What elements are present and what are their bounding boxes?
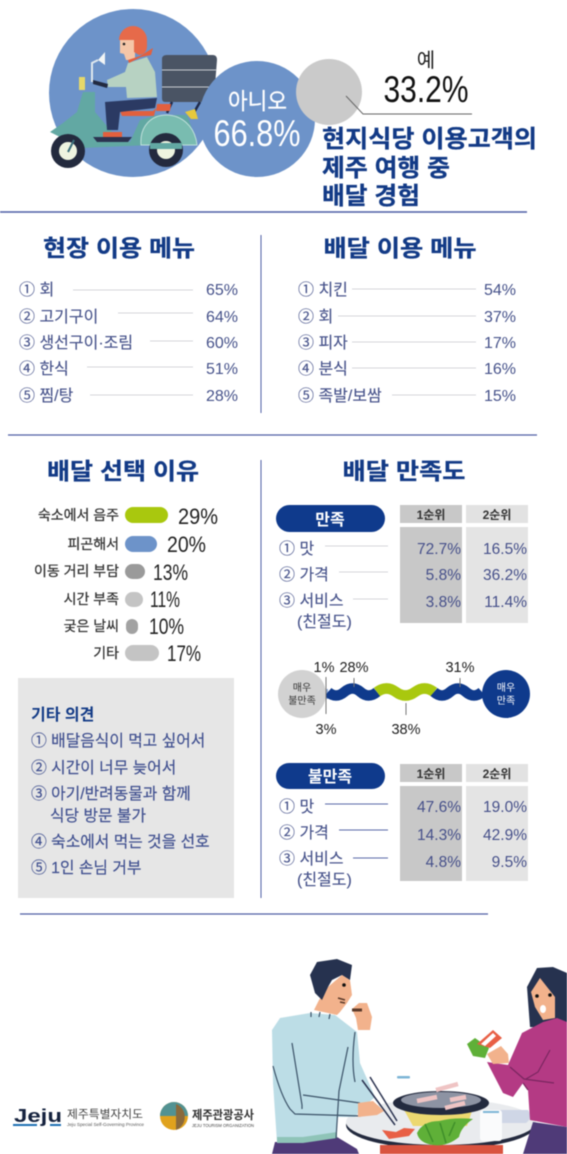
panel: other opinions: ⑤ 1인 손님 거부: [31, 859, 141, 877]
logo: Jeju special self-governing province: [13, 1106, 145, 1127]
panel: other opinions: 기타 의견: [31, 706, 94, 724]
list: delivery menu: 16%: [484, 361, 516, 378]
chart: satisfaction scale: 매우: [497, 682, 515, 694]
bar chart: reasons: 기타: [93, 645, 119, 661]
chart: satisfaction scale: 매우: [293, 682, 311, 694]
woman: [467, 967, 567, 1154]
panel: other opinions: ② 시간이 너무 늦어서: [31, 759, 176, 777]
heading: satisfaction: 배달 만족도: [342, 458, 466, 484]
chart: satisfaction scale: [278, 660, 530, 738]
bar chart: reasons: 17%: [167, 641, 201, 666]
table: dissatisfied: 19.0%: [483, 799, 527, 816]
table: dissatisfied: 4.8%: [426, 854, 461, 871]
heading: on-site menu: 현장 이용 메뉴: [43, 235, 195, 261]
bar chart: reasons: 시간 부족: [64, 591, 119, 607]
heading: delivery experience: 제주 여행 중: [322, 155, 450, 182]
bar chart: reasons: 이동 거리 부담: [34, 563, 119, 579]
panel: other opinions: [18, 678, 234, 898]
bar chart: reasons: 13%: [153, 560, 188, 585]
table: satisfied: (친절도): [297, 613, 352, 631]
list: on-site menu: ⑤ 찜/탕: [19, 387, 74, 405]
logo: Jeju special self-governing province: 제주특별자치도: [67, 1108, 143, 1121]
list: delivery menu: 54%: [484, 282, 516, 299]
chart: satisfaction scale: 38%: [391, 722, 421, 738]
list: on-site menu: ④ 한식: [19, 360, 69, 378]
list: on-site menu: 64%: [206, 309, 238, 326]
table: dissatisfied: (친절도): [297, 871, 352, 889]
table: satisfied: 36.2%: [483, 567, 527, 584]
logo: Jeju tourism organization: [160, 1102, 254, 1130]
icon: delivery scooter rider: [49, 9, 217, 177]
chart: no share circle: 66.8%: [214, 113, 300, 154]
list: delivery menu: ③ 피자: [298, 334, 348, 352]
table: dissatisfied: ③ 서비스: [279, 850, 344, 868]
list: delivery menu: ④ 분식: [298, 360, 348, 378]
heading: delivery menu: 배달 이용 메뉴: [324, 235, 476, 261]
chart: satisfaction scale: 만족: [497, 695, 515, 707]
bar chart: reasons: 10%: [149, 614, 184, 639]
panel: other opinions: ③ 아기/반려동물과 함께: [31, 785, 191, 803]
table and grill: [346, 1076, 536, 1154]
heading: delivery experience: 현지식당 이용고객의: [322, 126, 537, 153]
table: satisfied: ③ 서비스: [279, 592, 344, 610]
chart: no share circle: 아니오: [228, 88, 287, 114]
logo: Jeju special self-governing province: Jeju Special Self-Governing Province: [67, 1122, 145, 1127]
table: dissatisfied: 불만족: [308, 768, 352, 786]
table: satisfied: 11.4%: [484, 594, 527, 611]
list: delivery menu: 17%: [484, 335, 516, 352]
table: dissatisfied: 1순위: [417, 767, 445, 781]
bar chart: reasons: 29%: [178, 504, 218, 529]
table: satisfied: ① 맛: [279, 540, 314, 558]
list: on-site menu: ① 회: [19, 281, 54, 299]
panel: delivery menu: [298, 235, 516, 405]
panel: on-site menu: [19, 235, 238, 405]
table: satisfied: [276, 505, 528, 631]
logo: Jeju tourism organization: 제주관광공사: [192, 1107, 254, 1122]
table: satisfied: 만족: [315, 511, 345, 529]
chart: satisfaction scale: 3%: [316, 722, 337, 738]
chart: yes share circle: [296, 49, 472, 125]
table: dissatisfied: ① 맛: [279, 798, 314, 816]
chart: yes share circle: 33.2%: [384, 69, 468, 110]
table: dissatisfied: 2순위: [483, 767, 511, 781]
logo: Jeju special self-governing province: Jeju: [14, 1106, 62, 1126]
chart: satisfaction scale: 불만족: [288, 695, 316, 707]
list: on-site menu: ③ 생선구이·조림: [19, 334, 133, 352]
list: on-site menu: [19, 281, 238, 405]
table: satisfied: 72.7%: [417, 541, 461, 558]
list: on-site menu: ② 고기구이: [19, 308, 98, 326]
table: satisfied: 5.8%: [426, 567, 461, 584]
list: delivery menu: 37%: [484, 309, 516, 326]
table: dissatisfied: ② 가격: [279, 824, 329, 842]
list: on-site menu: 60%: [206, 335, 238, 352]
bar chart: reasons: 피곤해서: [67, 536, 119, 552]
heading: delivery experience: [322, 126, 537, 210]
table: dissatisfied: 47.6%: [417, 799, 461, 816]
panel: other opinions: ① 배달음식이 먹고 싶어서: [31, 732, 205, 750]
heading: reasons: 배달 선택 이유: [47, 458, 199, 484]
heading: delivery experience: 배달 경험: [322, 183, 420, 210]
panel: delivery satisfaction: [276, 458, 530, 889]
table: satisfied: 1순위: [417, 508, 445, 522]
list: on-site menu: 65%: [206, 282, 238, 299]
logo: Jeju tourism organization: JEJU TOURISM ORGANIZATION: [192, 1123, 254, 1128]
table: dissatisfied: 42.9%: [483, 827, 527, 844]
list: delivery menu: ① 치킨: [298, 281, 348, 299]
table: satisfied: ② 가격: [279, 566, 329, 584]
table: satisfied: 16.5%: [483, 541, 527, 558]
list: delivery menu: ⑤ 족발/보쌈: [298, 387, 382, 405]
chart: satisfaction scale: 31%: [445, 660, 475, 676]
table: dissatisfied: 14.3%: [417, 827, 461, 844]
bar chart: reasons: [34, 504, 218, 666]
table: dissatisfied: [276, 763, 528, 889]
list: delivery menu: ② 회: [298, 308, 333, 326]
chart: yes share circle: 예: [417, 49, 435, 72]
list: delivery menu: [298, 281, 516, 405]
man: [272, 959, 397, 1154]
list: on-site menu: 51%: [206, 361, 238, 378]
chart: no share circle: [199, 61, 315, 177]
panel: reasons for choosing delivery: [18, 458, 234, 898]
chart: satisfaction scale: 28%: [339, 660, 369, 676]
list: on-site menu: 28%: [206, 388, 238, 405]
panel: delivery experience: [49, 9, 537, 210]
table: dissatisfied: 9.5%: [492, 854, 527, 871]
bar chart: reasons: 숙소에서 음주: [38, 507, 119, 523]
bar chart: reasons: 궂은 날씨: [64, 618, 119, 634]
panel: other opinions: 식당 방문 불가: [50, 807, 146, 825]
table: satisfied: 2순위: [483, 508, 511, 522]
bar chart: reasons: 11%: [150, 587, 180, 612]
bar chart: reasons: 20%: [167, 532, 206, 557]
list: delivery menu: 15%: [484, 388, 516, 405]
chart: satisfaction scale: 1%: [314, 660, 335, 676]
panel: other opinions: ④ 숙소에서 먹는 것을 선호: [31, 833, 210, 851]
illustration: couple eating grilled meat: [272, 959, 567, 1154]
table: satisfied: 3.8%: [426, 594, 461, 611]
